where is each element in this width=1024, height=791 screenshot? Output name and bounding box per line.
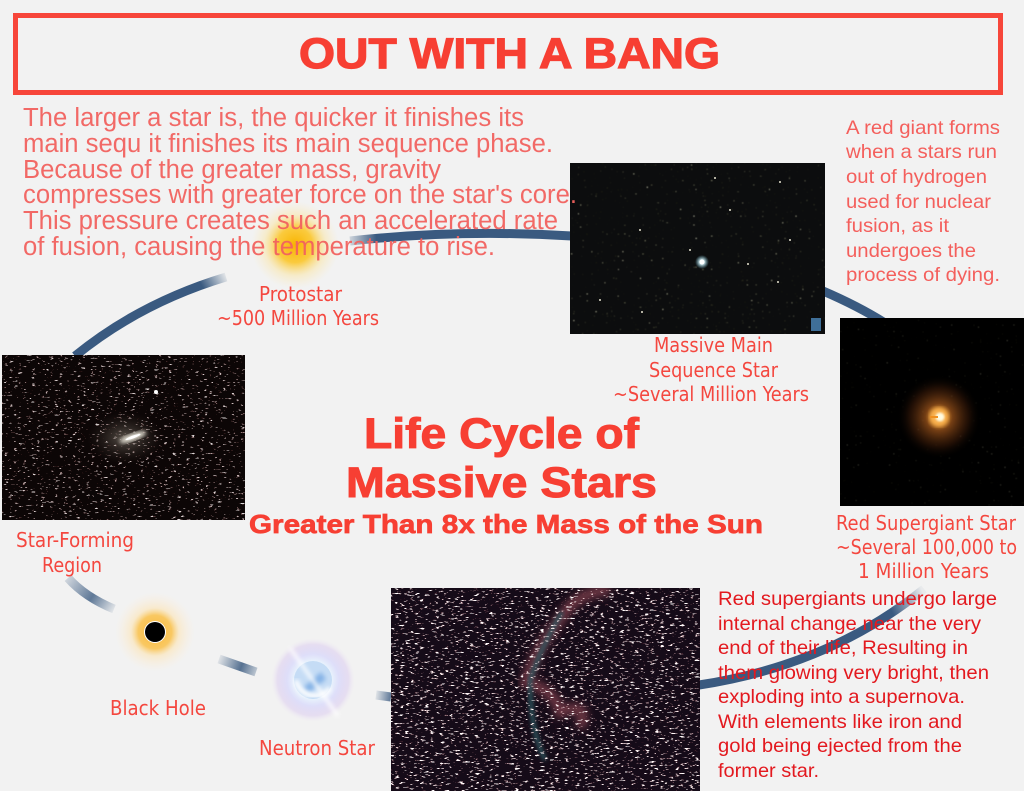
red supergiant label: 1 Million Years [858, 559, 989, 583]
supernova explanation [718, 588, 997, 782]
neutron star label: Neutron Star [259, 736, 376, 760]
intro paragraph: This pressure creates such an accelerated rate [23, 207, 558, 235]
red giant explanation: fusion, as it [846, 215, 950, 237]
red supergiant label [836, 511, 1017, 583]
red supergiant label: Red Supergiant Star [836, 511, 1017, 535]
intro paragraph [23, 104, 577, 261]
red giant explanation: out of hydrogen [846, 166, 987, 188]
red supergiant label: ~Several 100,000 to [836, 535, 1017, 559]
red giant explanation [845, 117, 1000, 286]
red giant explanation: A red giant forms [846, 117, 1000, 139]
heading: life cycle of massive stars: Massive Stars [346, 459, 657, 507]
intro paragraph: Because of the greater mass, gravity [23, 156, 441, 184]
supernova explanation: With elements like iron and [718, 711, 962, 733]
massive main sequence label [613, 333, 809, 406]
protostar label: ~500 Million Years [217, 306, 379, 330]
supernova explanation: former star. [718, 760, 819, 782]
supernova explanation: internal change near the very [718, 613, 981, 635]
red giant explanation: undergoes the [846, 240, 976, 262]
heading: life cycle of massive stars: Greater Than 8x the Mass of the Sun [249, 509, 763, 539]
supernova explanation: gold being ejected from the [718, 735, 962, 757]
image: massive main sequence star [570, 163, 825, 334]
life cycle arc [68, 233, 924, 697]
protostar [251, 201, 339, 289]
star-forming region label: Star-Forming [16, 528, 134, 552]
massive main sequence label: Massive Main [654, 333, 773, 357]
supernova explanation: exploding into a supernova. [718, 686, 965, 708]
black hole label: Black Hole [110, 696, 206, 720]
intro paragraph: The larger a star is, the quicker it finishes its [23, 104, 524, 132]
star-forming region label: Region [42, 553, 102, 577]
protostar label [217, 282, 379, 330]
red giant explanation: when a stars run [845, 141, 997, 163]
intro paragraph: compresses with greater force on the star's core. [23, 181, 577, 209]
red giant explanation: process of dying. [846, 264, 1000, 286]
icon: neutron star [271, 638, 355, 722]
supernova explanation: end of their life, Resulting in [718, 637, 968, 659]
title banner [16, 16, 1000, 92]
intro paragraph: of fusion, causing the temperature to rise. [23, 233, 495, 261]
supernova explanation: them glowing very bright, then [718, 662, 989, 684]
heading: life cycle of massive stars: Life Cycle of [364, 410, 640, 458]
red giant explanation: used for nuclear [846, 191, 992, 213]
massive main sequence label: ~Several Million Years [613, 382, 809, 406]
title banner: OUT WITH A BANG [299, 30, 720, 78]
image: star-forming region [2, 355, 245, 520]
image: red supergiant star [840, 318, 1024, 506]
supernova explanation: Red supergiants undergo large [718, 588, 997, 610]
star-forming region label [16, 528, 134, 577]
protostar label: Protostar [259, 282, 343, 306]
heading: life cycle of massive stars [249, 410, 763, 539]
intro paragraph: main sequ it finishes its main sequence phase. [23, 130, 553, 158]
massive main sequence label: Sequence Star [649, 358, 779, 382]
image: supernova remnant [391, 588, 700, 791]
icon: black hole [115, 592, 195, 672]
